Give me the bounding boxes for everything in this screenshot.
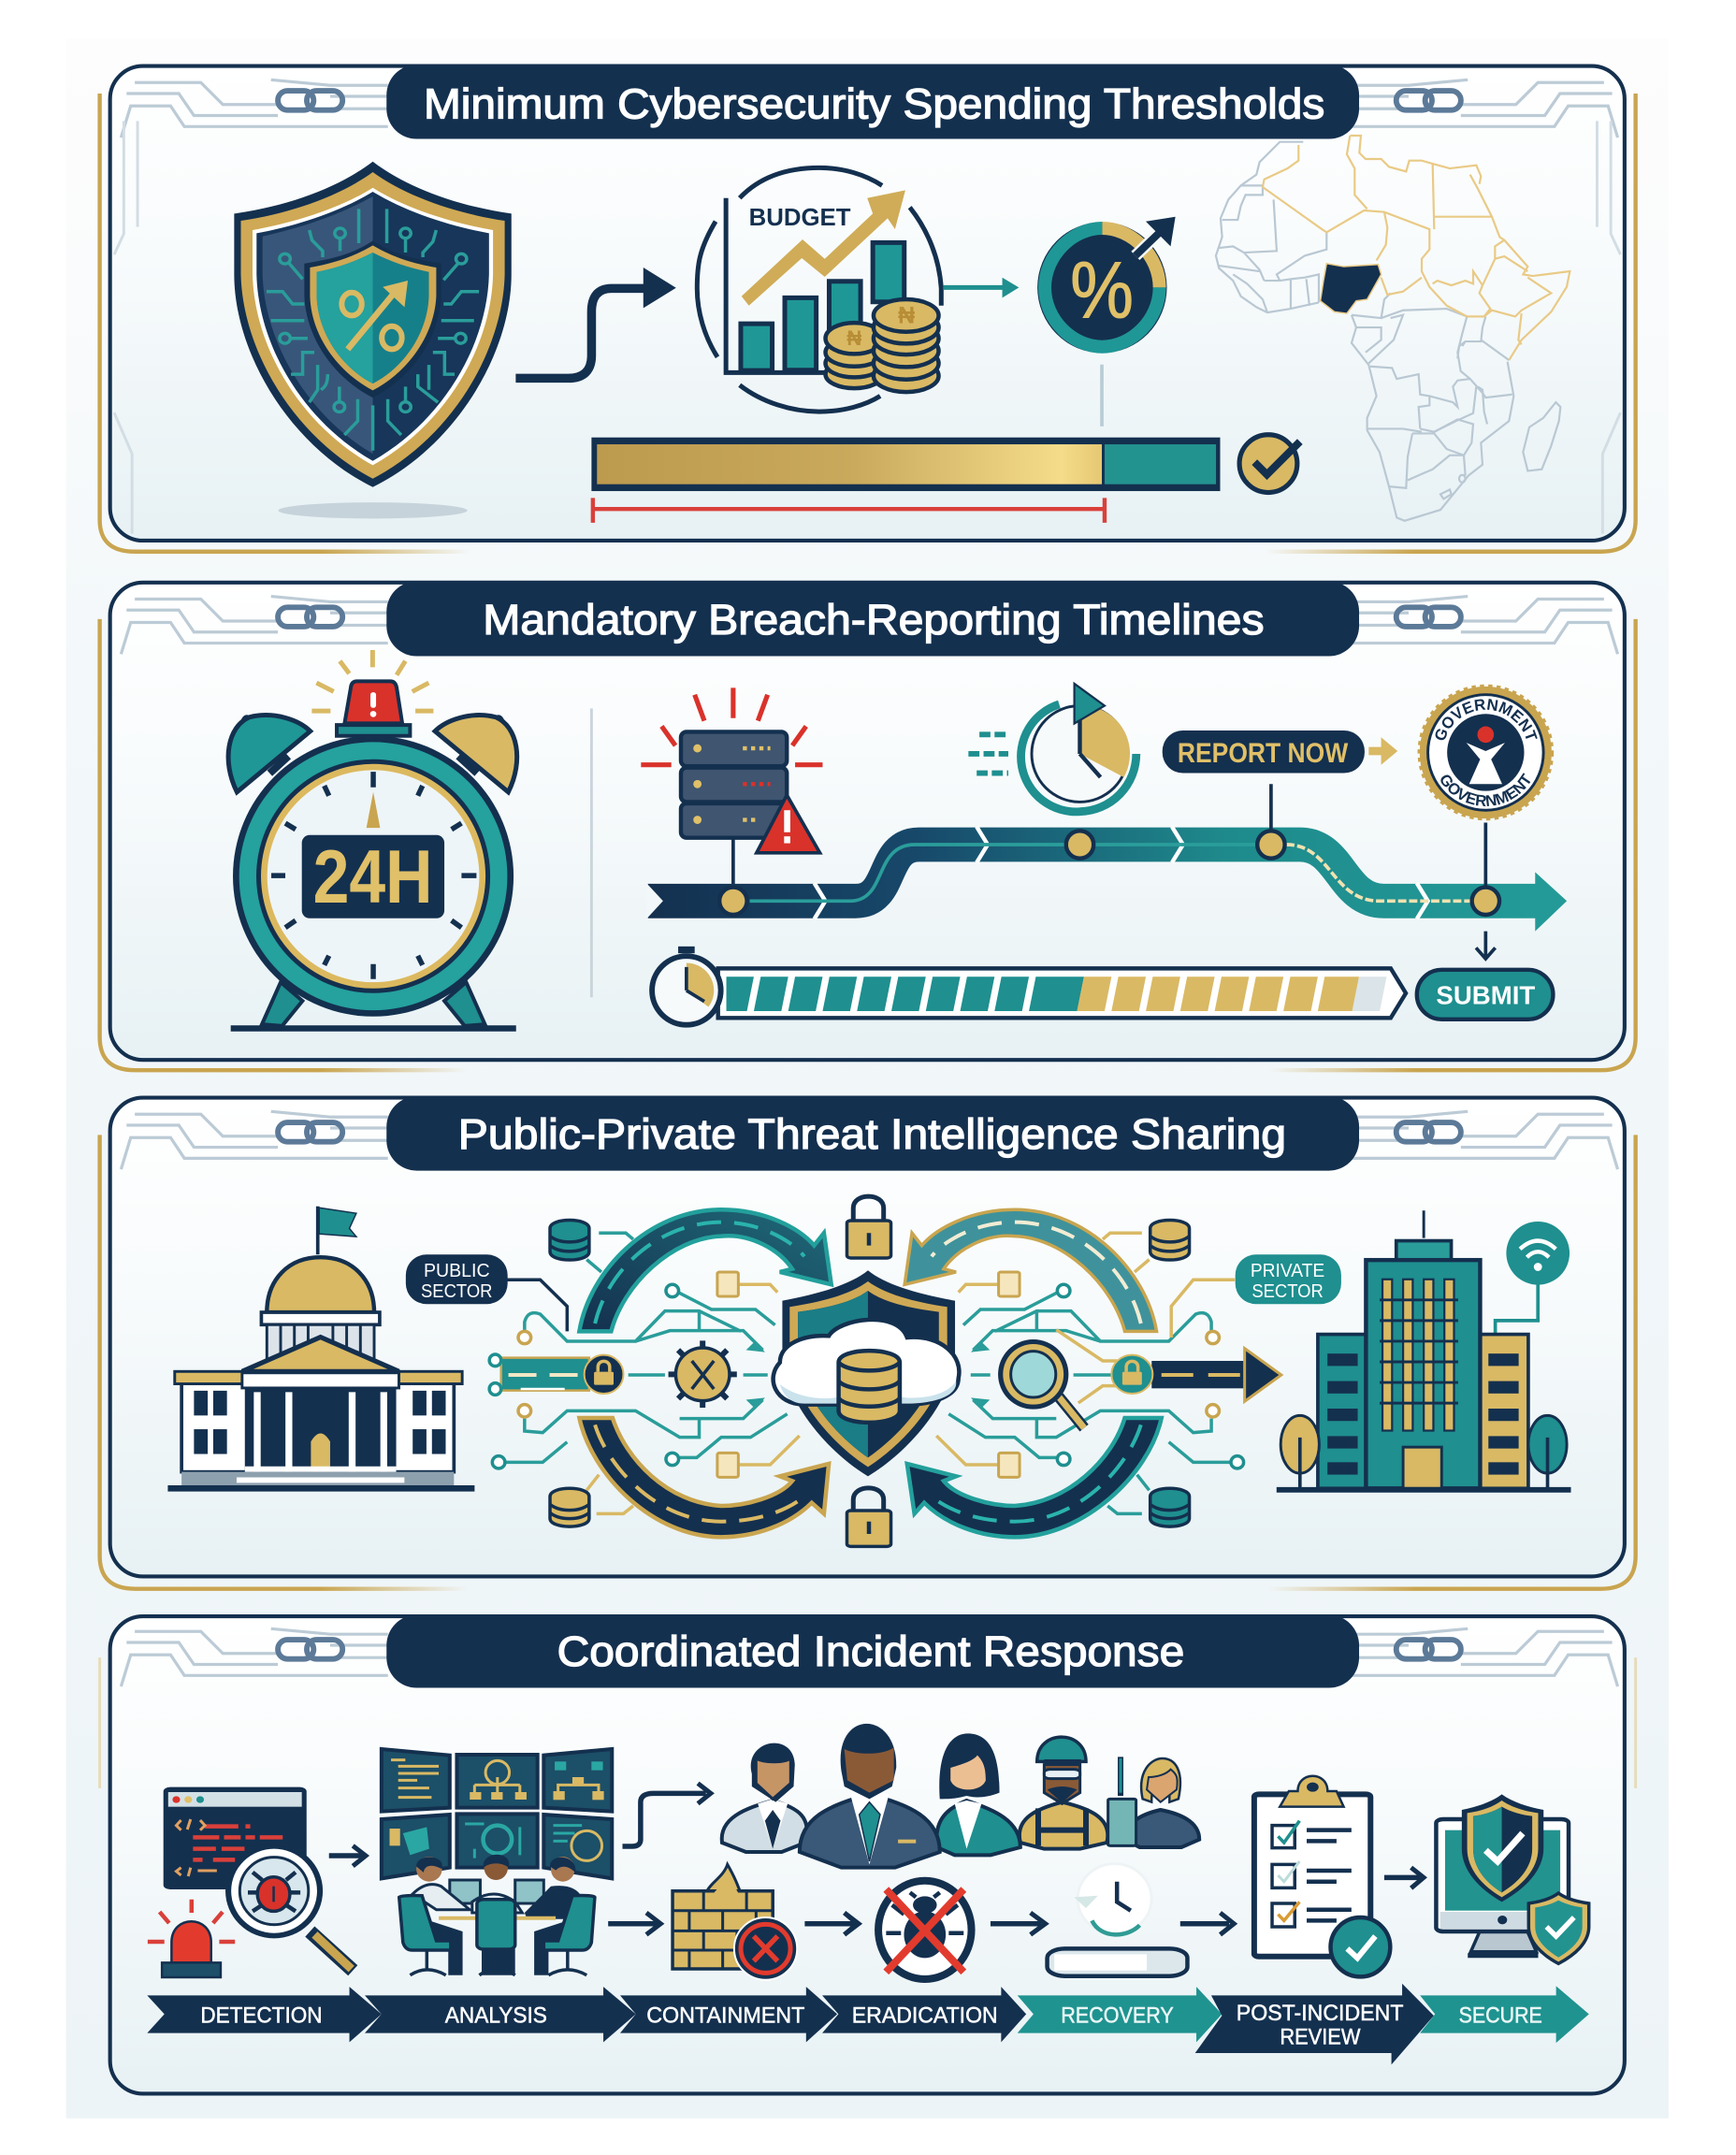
circuit connections xyxy=(506,1233,1230,1513)
timeline road with milestones xyxy=(646,784,1567,932)
stage: secure xyxy=(1420,1986,1589,2043)
icon: threat gear xyxy=(669,1340,737,1408)
stage: post-incident review: REVIEW xyxy=(1280,2025,1361,2050)
stage: analysis xyxy=(365,1987,636,2042)
icon group: detection and analysis stages xyxy=(148,1749,858,1980)
process chevrons xyxy=(147,1984,1589,2064)
label: private sector: SECTOR xyxy=(1251,1280,1324,1302)
icon: budget chart with coins: ₦ xyxy=(898,303,915,329)
arrow: eradication to recovery xyxy=(991,1913,1046,1934)
button: report now xyxy=(1163,730,1397,774)
heading: incident response: Coordinated Incident Response xyxy=(557,1627,1184,1675)
stage: recovery: RECOVERY xyxy=(1061,2003,1174,2028)
arrow: analysis to response team xyxy=(622,1784,711,1846)
icon: 24H alarm clock: 24H xyxy=(313,835,433,919)
stage: containment: CONTAINMENT xyxy=(646,2003,805,2028)
arrow: review to secure xyxy=(1384,1868,1424,1888)
icon: recovery clock and bar xyxy=(1048,1864,1187,1976)
stage: analysis: ANALYSIS xyxy=(445,2003,547,2028)
icon: 24H alarm clock xyxy=(228,650,517,1028)
arrow: detection to analysis xyxy=(329,1845,366,1866)
right data stream xyxy=(1111,1349,1281,1401)
progress bar with stopwatch xyxy=(652,947,1406,1025)
stage: detection xyxy=(147,1987,382,2042)
heading: incident response xyxy=(386,1615,1359,1688)
stage: containment xyxy=(620,1987,837,2042)
label: public sector: PUBLIC xyxy=(424,1260,490,1281)
icon: government seal xyxy=(1418,685,1555,821)
icon: response team xyxy=(722,1724,1199,1868)
stage: recovery xyxy=(1018,1987,1222,2042)
label: private sector xyxy=(1236,1254,1341,1304)
map: Africa with Nigeria highlighted xyxy=(1216,136,1570,521)
data cylinders xyxy=(550,1221,1190,1526)
icon: SOC monitor wall with analysts xyxy=(382,1749,612,1975)
icon: check badge xyxy=(1239,435,1300,493)
icon: breached server with warning xyxy=(641,687,822,888)
arrow: analysis to containment xyxy=(608,1913,660,1934)
button: submit: SUBMIT xyxy=(1436,981,1535,1010)
icon: magnifier xyxy=(998,1339,1084,1428)
icon: budget chart with coins xyxy=(697,167,941,412)
button: submit xyxy=(1417,932,1553,1020)
arrow: containment to eradication xyxy=(804,1913,858,1934)
information flow arcs xyxy=(579,1209,1162,1537)
heading: spending thresholds: Minimum Cybersecurity Spending Thresholds xyxy=(424,80,1324,127)
stage: eradication: ERADICATION xyxy=(852,2003,998,2028)
icon: budget chart with coins: ₦ xyxy=(846,326,861,350)
icon: secure monitor with shields xyxy=(1436,1794,1589,1963)
panel: Minimum Cybersecurity Spending Thresholds xyxy=(100,65,1636,552)
locks xyxy=(846,1196,891,1546)
icon: government seal: GOVERNMENT xyxy=(1440,773,1530,806)
button: report now: REPORT NOW xyxy=(1178,738,1348,769)
stage: eradication xyxy=(822,1987,1026,2042)
threshold bar xyxy=(591,365,1220,523)
arrow: eradication inflow xyxy=(805,1913,859,1934)
heading: threat intelligence sharing: Public-Private Threat Intelligence Sharing xyxy=(458,1110,1286,1158)
panel: Coordinated Incident Response xyxy=(100,1615,1636,2093)
heading: reporting timelines xyxy=(386,581,1359,657)
center exchange diagram xyxy=(489,1196,1281,1546)
heading: reporting timelines: Mandatory Breach-Reporting Timelines xyxy=(483,596,1265,644)
panel: Mandatory Breach-Reporting Timelines xyxy=(97,580,1638,1072)
label: public sector xyxy=(406,1254,508,1304)
label: private sector: PRIVATE xyxy=(1251,1260,1324,1281)
small gold nodes xyxy=(717,1272,1020,1477)
arrow: budget to percent xyxy=(943,278,1019,297)
heading: spending thresholds xyxy=(386,65,1359,139)
stage: post-incident review xyxy=(1195,1984,1434,2064)
panel: Public-Private Threat Intelligence Sharing xyxy=(100,1096,1636,1589)
icon: central shield with cloud database xyxy=(774,1270,959,1476)
icon: alarm siren xyxy=(148,1900,235,1977)
left data stream xyxy=(489,1354,623,1395)
arrow: shield to budget xyxy=(515,268,676,378)
icon: budget chart with coins: BUDGET xyxy=(749,205,851,231)
icon: percent shield xyxy=(234,162,512,518)
icon: government seal: GOVERNMENT xyxy=(1435,699,1538,741)
icon: detection terminal xyxy=(164,1787,353,1971)
icon: corporate tower xyxy=(1277,1210,1571,1490)
icon: percent dial: % xyxy=(1070,247,1134,336)
icon group: response team through secure stages xyxy=(722,1724,1589,1979)
icon: deadline clock xyxy=(968,684,1136,812)
heading: threat intelligence sharing xyxy=(386,1096,1359,1171)
stage: post-incident review: POST-INCIDENT xyxy=(1237,2001,1404,2026)
icon: firewall xyxy=(673,1864,797,1980)
icon: government capitol building xyxy=(167,1207,474,1488)
icon: post-incident checklist xyxy=(1254,1776,1390,1976)
icon: percent dial xyxy=(1037,217,1176,353)
stage: detection: DETECTION xyxy=(200,2003,323,2028)
icon: eradicated bug xyxy=(878,1881,972,1979)
label: public sector: SECTOR xyxy=(421,1280,493,1302)
arrow: recovery to review xyxy=(1180,1913,1234,1934)
stage: secure: SECURE xyxy=(1459,2003,1542,2028)
